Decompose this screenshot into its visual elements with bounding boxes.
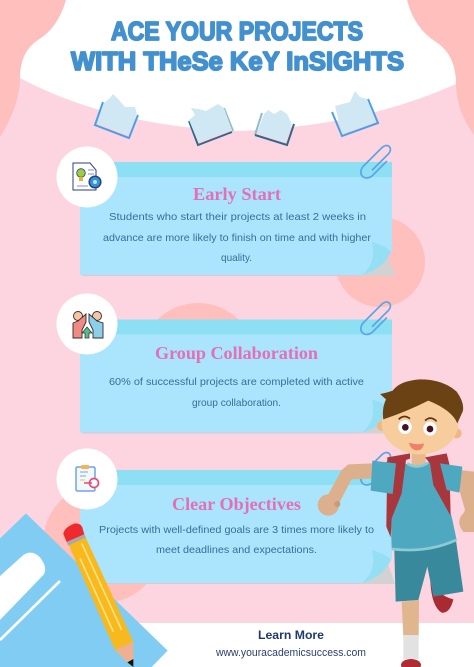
text: clear objectives: Projects with well-defined goals are 3 times more likely to <box>99 524 374 536</box>
icon badge: clipboard target <box>56 448 118 510</box>
text: early start: Early Start <box>193 184 281 204</box>
text: early start: advance are more likely to finish on time and with higher <box>103 232 372 244</box>
panel: group collaboration <box>80 320 395 434</box>
white header shape <box>20 0 456 131</box>
shirt <box>391 459 457 550</box>
icon badge: teamwork <box>56 294 118 354</box>
shirt collar and hem <box>392 463 456 550</box>
text: group collaboration: group collaboration. <box>192 397 281 409</box>
footer text: www.youracademicsuccess.com <box>215 647 366 659</box>
illustration: blue paper and pencil <box>0 513 168 667</box>
left salmon corner <box>0 0 66 137</box>
eyes <box>398 416 437 436</box>
text: early start: quality. <box>221 252 252 264</box>
backpack straps <box>386 453 451 537</box>
text: group collaboration <box>109 343 364 409</box>
shoe <box>401 659 421 667</box>
sock <box>403 635 419 659</box>
icon: book 1 <box>95 94 138 138</box>
panel: early start <box>80 162 395 276</box>
sleeves <box>371 461 462 494</box>
text: early start: Students who start their projects at least 2 weeks in <box>109 211 366 223</box>
icon: book 3 <box>255 110 294 145</box>
decorative circle 3 <box>43 483 163 603</box>
icon: paperclip 2 <box>358 300 395 337</box>
icon: book 2 <box>189 104 233 145</box>
decorative circle 2 <box>140 303 256 419</box>
icon: paperclip 3 <box>358 450 395 488</box>
title: WITH THeSe KeY InSIGHTS <box>71 46 404 76</box>
left arm <box>318 463 373 516</box>
text: group collaboration: Group Collaboration <box>155 343 318 363</box>
text: early start <box>103 184 372 264</box>
text: group collaboration: 60% of successful projects are completed with active <box>109 376 364 388</box>
footer text: Learn More <box>258 628 324 642</box>
head <box>382 392 458 454</box>
back shoe <box>430 582 453 613</box>
blue paper <box>0 513 168 667</box>
pencil <box>63 523 133 667</box>
text: clear objectives: meet deadlines and expectations. <box>156 544 317 556</box>
hair <box>380 379 463 423</box>
mouth <box>409 443 424 450</box>
decorative circle 1 <box>335 217 425 307</box>
panel: clear objectives <box>80 470 395 584</box>
shorts <box>394 541 463 602</box>
text: clear objectives: Clear Objectives <box>172 494 301 514</box>
illustration: boy with backpack <box>318 379 474 667</box>
text: clear objectives <box>99 494 374 556</box>
icon: paperclip 1 <box>358 143 395 181</box>
footer text <box>215 628 366 659</box>
right salmon corner <box>407 0 474 135</box>
paper label <box>0 553 45 620</box>
ears <box>377 421 387 431</box>
title: ACE YOUR PROJECTS <box>111 16 363 46</box>
icon: book 4 <box>332 91 378 136</box>
title <box>71 16 404 76</box>
footer band <box>0 623 474 667</box>
right arm <box>459 470 474 532</box>
paper line <box>0 581 60 640</box>
neck <box>412 448 426 467</box>
standing leg <box>402 600 419 637</box>
icon badge: idea document <box>56 146 118 208</box>
